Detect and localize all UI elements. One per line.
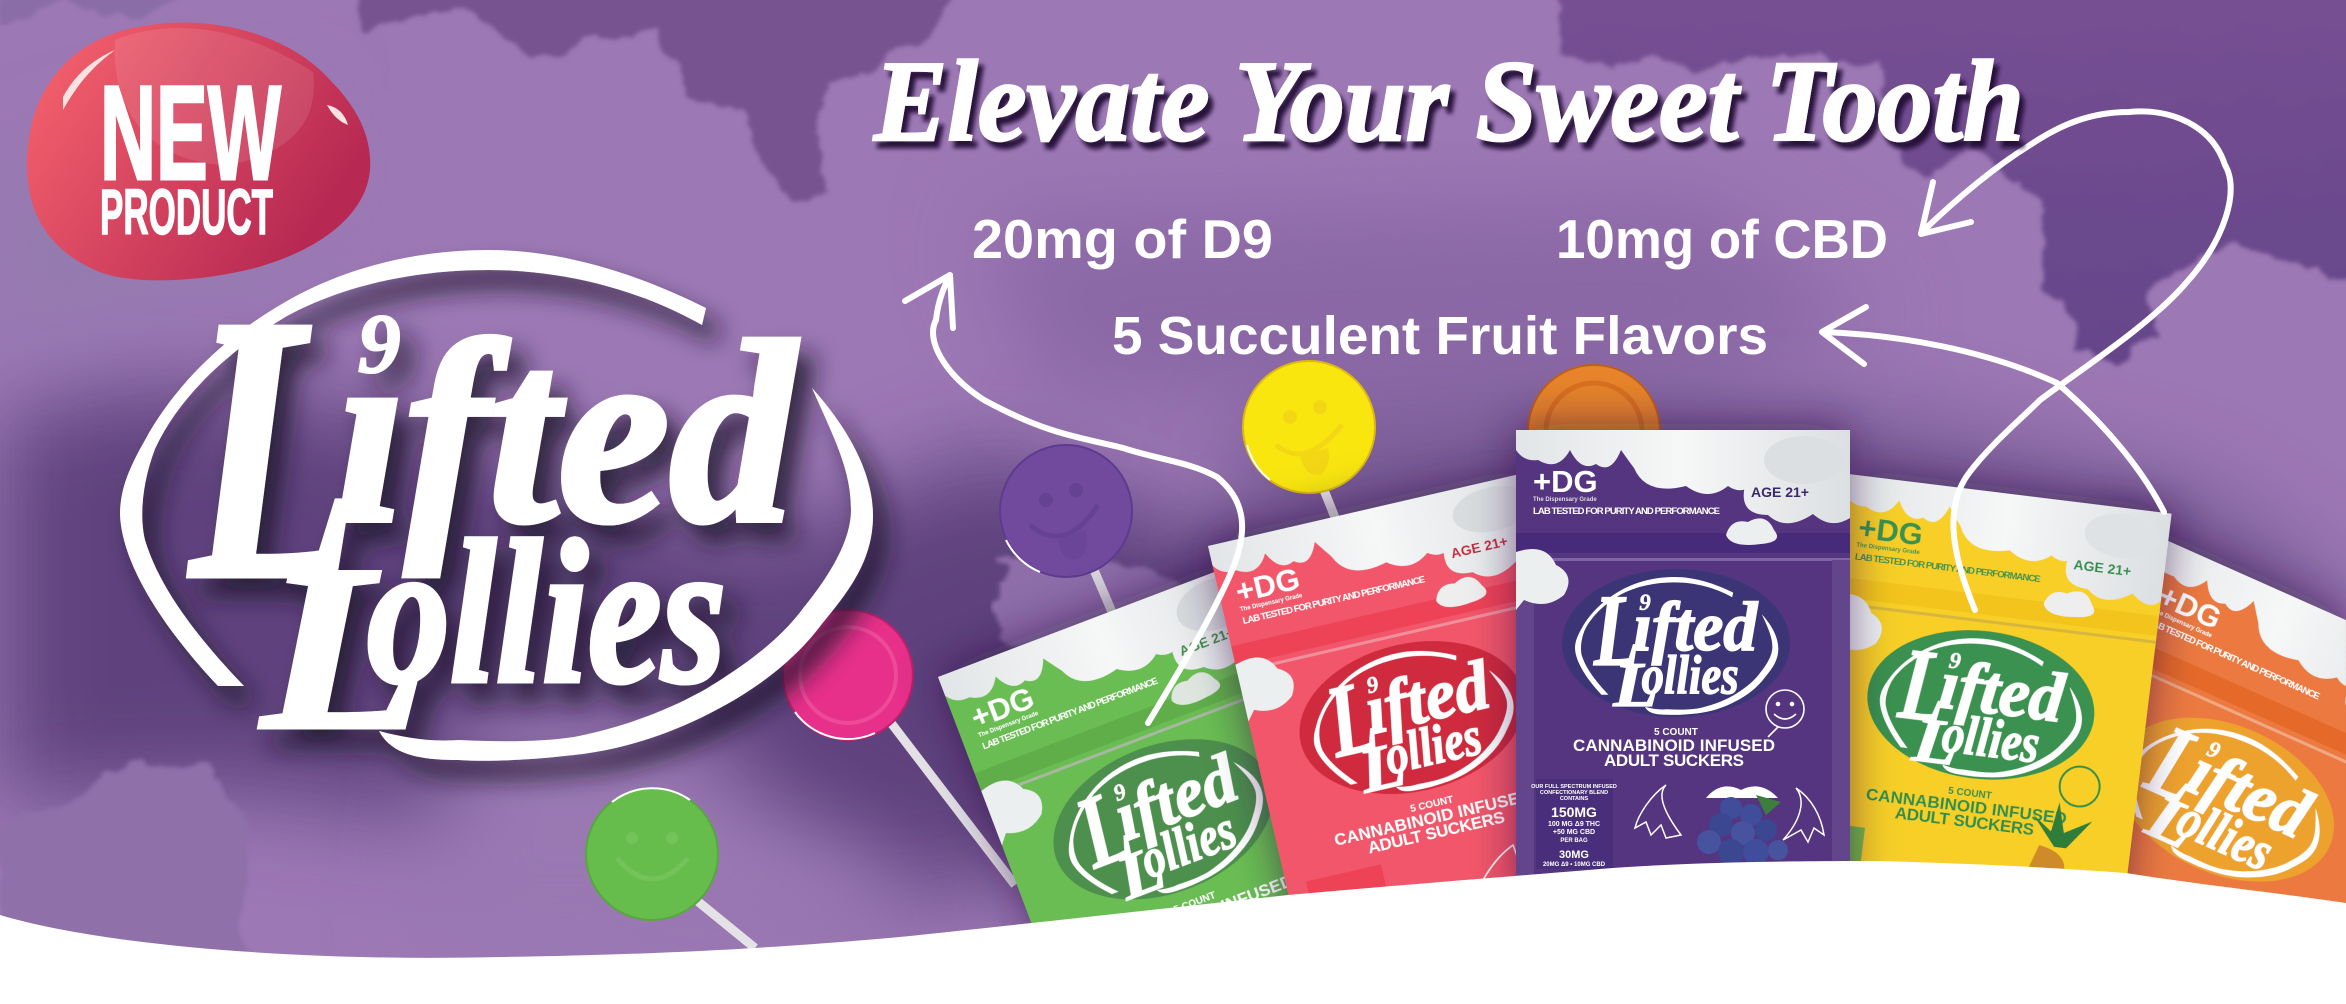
bag: yellow pack: [1850, 448, 2198, 878]
logo on red pack: 9: [1364, 671, 1381, 698]
logo on yellow pack: L: [1908, 703, 1962, 779]
bag: yellow pack: The Dispensary Grade: [1856, 543, 1921, 556]
bag: yellow pack: ADULT SUCKERS: [1894, 803, 2035, 839]
logo on green pack: ifted: [1103, 739, 1248, 856]
bag: green pack: [925, 544, 1288, 926]
bag: green pack: +DG: [966, 680, 1039, 735]
logo on green pack: L: [1062, 769, 1145, 891]
bag: purple pack: The Dispensary Grade: [1533, 497, 1597, 503]
bag: red pack: AGE 21+: [1449, 533, 1509, 561]
bag: green pack: LAB TESTED FOR PURITY AND PERFORMANCE: [981, 676, 1160, 752]
bag: purple pack: [1516, 430, 1850, 910]
bag: purple pack: LAB TESTED FOR PURITY AND PERFORMANCE: [1533, 506, 1720, 517]
bag: orange pack: The Dispensary Grade: [2152, 608, 2213, 640]
lollipop: purple: [1000, 445, 1132, 612]
info panel: 20MG Δ9 • 10MG CBD: [1543, 862, 1606, 868]
badge: new product: NEW: [100, 59, 281, 208]
bag: purple pack: 5 COUNT: [1654, 727, 1698, 738]
logo on red pack: L: [1316, 659, 1387, 780]
info panel: CONFECTIONARY BLEND: [1540, 790, 1608, 796]
bag: yellow pack: 5 COUNT: [1947, 786, 1992, 802]
logo on green pack: 9: [1110, 778, 1130, 806]
bag: yellow pack: LAB TESTED FOR PURITY AND PERFORMANCE: [1854, 552, 2041, 585]
bag: green pack: 5 COUNT: [1172, 890, 1217, 916]
text: 5 Succulent Fruit Flavors: 5 Succulent Fruit Flavors: [1112, 306, 1768, 366]
bag: red pack: CANNABINOID INFUSED: [1332, 786, 1533, 850]
main logo: Lifted Lollies: [120, 238, 873, 779]
main logo: Lifted Lollies: ifted: [335, 289, 799, 577]
text: 20mg of D9: 20mg of D9: [972, 208, 1273, 270]
white wave footer: [0, 861, 2346, 1004]
logo on red pack: ifted: [1358, 645, 1497, 750]
logo on orange pack: [2135, 727, 2320, 878]
text: 10mg of CBD: 10mg of CBD: [1556, 208, 1888, 270]
logo on red pack: ollies: [1379, 705, 1487, 786]
logo on orange pack: L: [2136, 779, 2207, 862]
bag: yellow pack: AGE 21+: [2073, 556, 2132, 579]
logo on orange pack: L: [2132, 704, 2220, 826]
arrow: from yellow bag to 10mg of CBD: [1921, 111, 2231, 610]
bag: green pack: AGE 21+: [1177, 623, 1237, 659]
logo on purple pack: 9: [1639, 590, 1651, 615]
logo on orange pack: ollies: [2169, 787, 2282, 882]
logo on purple pack: L: [1593, 575, 1640, 688]
bag: orange pack: [2107, 498, 2346, 903]
logo on orange pack: 9: [2203, 736, 2225, 764]
bag: red pack: +DG: [1232, 561, 1303, 609]
bag: red pack: The Dispensary Grade: [1240, 593, 1304, 613]
logo on orange pack: ifted: [2177, 732, 2323, 854]
bag: purple pack: ADULT SUCKERS: [1604, 751, 1744, 770]
logo on green pack: L: [1106, 831, 1174, 914]
badge: new product: PRODUCT: [100, 176, 273, 248]
logo on yellow pack: ifted: [1935, 645, 2069, 738]
logo on yellow pack: ollies: [1939, 702, 2043, 774]
icon: smiley lollipop: [1766, 690, 1804, 737]
bag: green pack: CANNABINOID INFUSED: [1100, 871, 1296, 961]
bag: green pack: The Dispensary Grade: [978, 711, 1040, 739]
logo on red pack: L: [1351, 727, 1411, 807]
bag: purple pack: +DG: [1533, 464, 1598, 499]
bag: orange pack: +DG: [2153, 578, 2227, 636]
info panel: 150MG: [1551, 804, 1597, 820]
main logo: Lifted Lollies: ollies: [367, 499, 726, 726]
bag: yellow pack: 50MG: [1803, 843, 1845, 865]
logo on red pack: [1314, 650, 1514, 794]
bag: orange pack: LAB TESTED FOR PURITY AND PERFORMANCE: [2146, 616, 2321, 702]
logo on purple pack: [1575, 575, 1778, 720]
logo on purple pack: L: [1612, 649, 1658, 720]
lollipop: yellow: [1243, 361, 1375, 520]
logo on yellow pack: L: [1893, 627, 1953, 745]
info panel: 30MG: [1559, 849, 1589, 861]
info panel: +50 MG CBD: [1553, 829, 1595, 836]
bag: red pack: 5 COUNT: [1409, 794, 1455, 815]
main logo: Lifted Lollies: 9: [358, 297, 400, 391]
info panel: PER BAG: [1560, 838, 1588, 844]
logo on yellow pack: [1880, 638, 2082, 778]
badge: new product: [27, 22, 370, 280]
info panel: [1531, 779, 1617, 869]
illustration: winged grapes: [1635, 785, 1824, 865]
logo on purple pack: ifted: [1633, 588, 1758, 666]
info panel: 100 MG Δ9 THC: [1548, 821, 1600, 828]
arrow: to 5 Succulent Fruit Flavors: [1822, 307, 2164, 512]
logo on purple pack: ollies: [1642, 644, 1739, 705]
bag: red pack: [1185, 450, 1516, 898]
lollipop: green: [586, 788, 755, 948]
bag: yellow pack: CANNABINOID INFUSED: [1865, 785, 2068, 828]
main logo: Lifted Lollies: L: [186, 238, 360, 659]
bag: yellow pack: +DG: [1856, 510, 1925, 552]
heading: Elevate Your Sweet Tooth: [873, 38, 2024, 166]
bag: purple pack: AGE 21+: [1751, 484, 1809, 500]
lollipop: orange: [1528, 365, 1660, 497]
lollipop: pink: [783, 610, 1015, 885]
bag: red pack: LAB TESTED FOR PURITY AND PERFORMANCE: [1242, 574, 1426, 627]
info panel: CONTAINS: [1560, 796, 1588, 802]
logo on green pack: [1068, 750, 1264, 902]
arrow: from bag to 20mg of D9: [905, 275, 1242, 723]
bag: red pack: ADULT SUCKERS: [1366, 807, 1507, 857]
logo on green pack: ollies: [1132, 798, 1244, 890]
logo on yellow pack: 9: [1948, 648, 1963, 674]
info panel: OUR FULL SPECTRUM INFUSED: [1531, 784, 1617, 790]
main logo: Lifted Lollies: L: [260, 518, 427, 779]
bag: purple pack: CANNABINOID INFUSED: [1573, 736, 1775, 755]
